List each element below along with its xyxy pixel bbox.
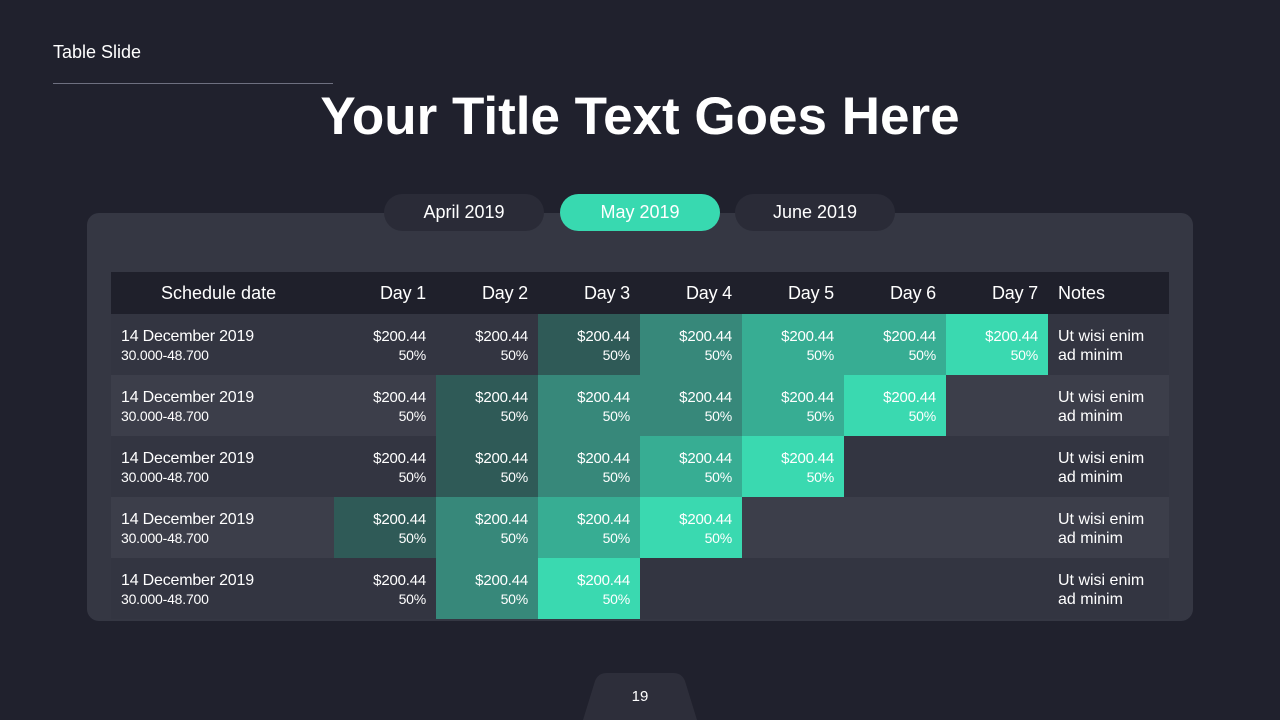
tab: April 2019	[384, 194, 544, 231]
row 3: $200.44	[577, 450, 630, 467]
row 2: $200.44	[883, 389, 936, 406]
row 5: $200.44	[577, 572, 630, 589]
row 2: $200.44	[781, 389, 834, 406]
page number tab: 19	[632, 688, 648, 705]
row 3	[111, 436, 1169, 497]
row 5: 30.000-48.700	[121, 591, 209, 607]
table header: Day 1	[380, 283, 426, 303]
row 2: $200.44	[679, 389, 732, 406]
row 4: $200.44	[373, 511, 426, 528]
title: Your Title Text Goes Here	[320, 87, 960, 146]
row 2: 50%	[399, 408, 426, 424]
row 4: 30.000-48.700	[121, 530, 209, 546]
tab: May 2019: May 2019	[600, 202, 680, 222]
row 1: 50%	[501, 347, 528, 363]
row 1: Ut wisi enim ad minim	[1058, 328, 1144, 364]
row 4: 50%	[603, 530, 630, 546]
row 3: 50%	[807, 469, 834, 485]
tab: June 2019: June 2019	[773, 202, 857, 222]
tab: April 2019: April 2019	[423, 202, 505, 222]
row 2	[111, 375, 1169, 436]
row 3: $200.44	[679, 450, 732, 467]
row 5: $200.44	[475, 572, 528, 589]
table header: Day 5	[788, 283, 834, 303]
row 1: 50%	[807, 347, 834, 363]
row 4: 14 December 2019	[121, 511, 254, 528]
row 2: Ut wisi enim ad minim	[1058, 389, 1144, 425]
row 2: 50%	[603, 408, 630, 424]
row 1	[111, 314, 1169, 375]
tab: June 2019	[735, 194, 895, 231]
row 1: 14 December 2019	[121, 328, 254, 345]
row 4: $200.44	[679, 511, 732, 528]
row 5: 50%	[603, 591, 630, 607]
table header: Day 3	[584, 283, 630, 303]
panel: table card	[87, 213, 1193, 621]
row 3: $200.44	[475, 450, 528, 467]
row 2: 50%	[705, 408, 732, 424]
row 4: 50%	[501, 530, 528, 546]
label: Table Slide: Table Slide	[53, 42, 141, 62]
row 1: 50%	[1011, 347, 1038, 363]
row 1: $200.44	[373, 328, 426, 345]
row 3: $200.44	[781, 450, 834, 467]
table header	[111, 272, 1169, 314]
row 5: 14 December 2019	[121, 572, 254, 589]
row 3: 30.000-48.700	[121, 469, 209, 485]
row 1: 50%	[909, 347, 936, 363]
row 4: $200.44	[475, 511, 528, 528]
table header: Notes	[1058, 283, 1105, 303]
row 2: 14 December 2019	[121, 389, 254, 406]
row 4	[111, 497, 1169, 558]
row 3: Ut wisi enim ad minim	[1058, 450, 1144, 486]
row 1: $200.44	[781, 328, 834, 345]
table header: Day 6	[890, 283, 936, 303]
row 1: $200.44	[679, 328, 732, 345]
row 5: 50%	[501, 591, 528, 607]
row 2: $200.44	[475, 389, 528, 406]
row 3: 50%	[705, 469, 732, 485]
row 2: $200.44	[373, 389, 426, 406]
row 1: $200.44	[577, 328, 630, 345]
row 5: 50%	[399, 591, 426, 607]
row 3: 14 December 2019	[121, 450, 254, 467]
row 2: 50%	[807, 408, 834, 424]
page number tab	[583, 673, 697, 720]
row 3: 50%	[399, 469, 426, 485]
row 1: 50%	[603, 347, 630, 363]
row 3: 50%	[603, 469, 630, 485]
row 4: $200.44	[577, 511, 630, 528]
row 2: 50%	[501, 408, 528, 424]
row 1: 50%	[705, 347, 732, 363]
row 5: $200.44	[373, 572, 426, 589]
table header: Day 7	[992, 283, 1038, 303]
row 3: 50%	[501, 469, 528, 485]
row 1: $200.44	[883, 328, 936, 345]
row 1: 50%	[399, 347, 426, 363]
row 4: 50%	[705, 530, 732, 546]
row 2: 50%	[909, 408, 936, 424]
table header: Day 2	[482, 283, 528, 303]
row 3: $200.44	[373, 450, 426, 467]
tab: May 2019	[560, 194, 720, 231]
row 1: $200.44	[475, 328, 528, 345]
row 2: $200.44	[577, 389, 630, 406]
row 4: 50%	[399, 530, 426, 546]
row 1: $200.44	[985, 328, 1038, 345]
table header: Day 4	[686, 283, 732, 303]
table header: Schedule date	[161, 283, 276, 303]
row 5: Ut wisi enim ad minim	[1058, 572, 1144, 608]
row 2: 30.000-48.700	[121, 408, 209, 424]
row 1: 30.000-48.700	[121, 347, 209, 363]
table	[111, 272, 1169, 619]
row 4: Ut wisi enim ad minim	[1058, 511, 1144, 547]
row 5	[111, 558, 1169, 619]
